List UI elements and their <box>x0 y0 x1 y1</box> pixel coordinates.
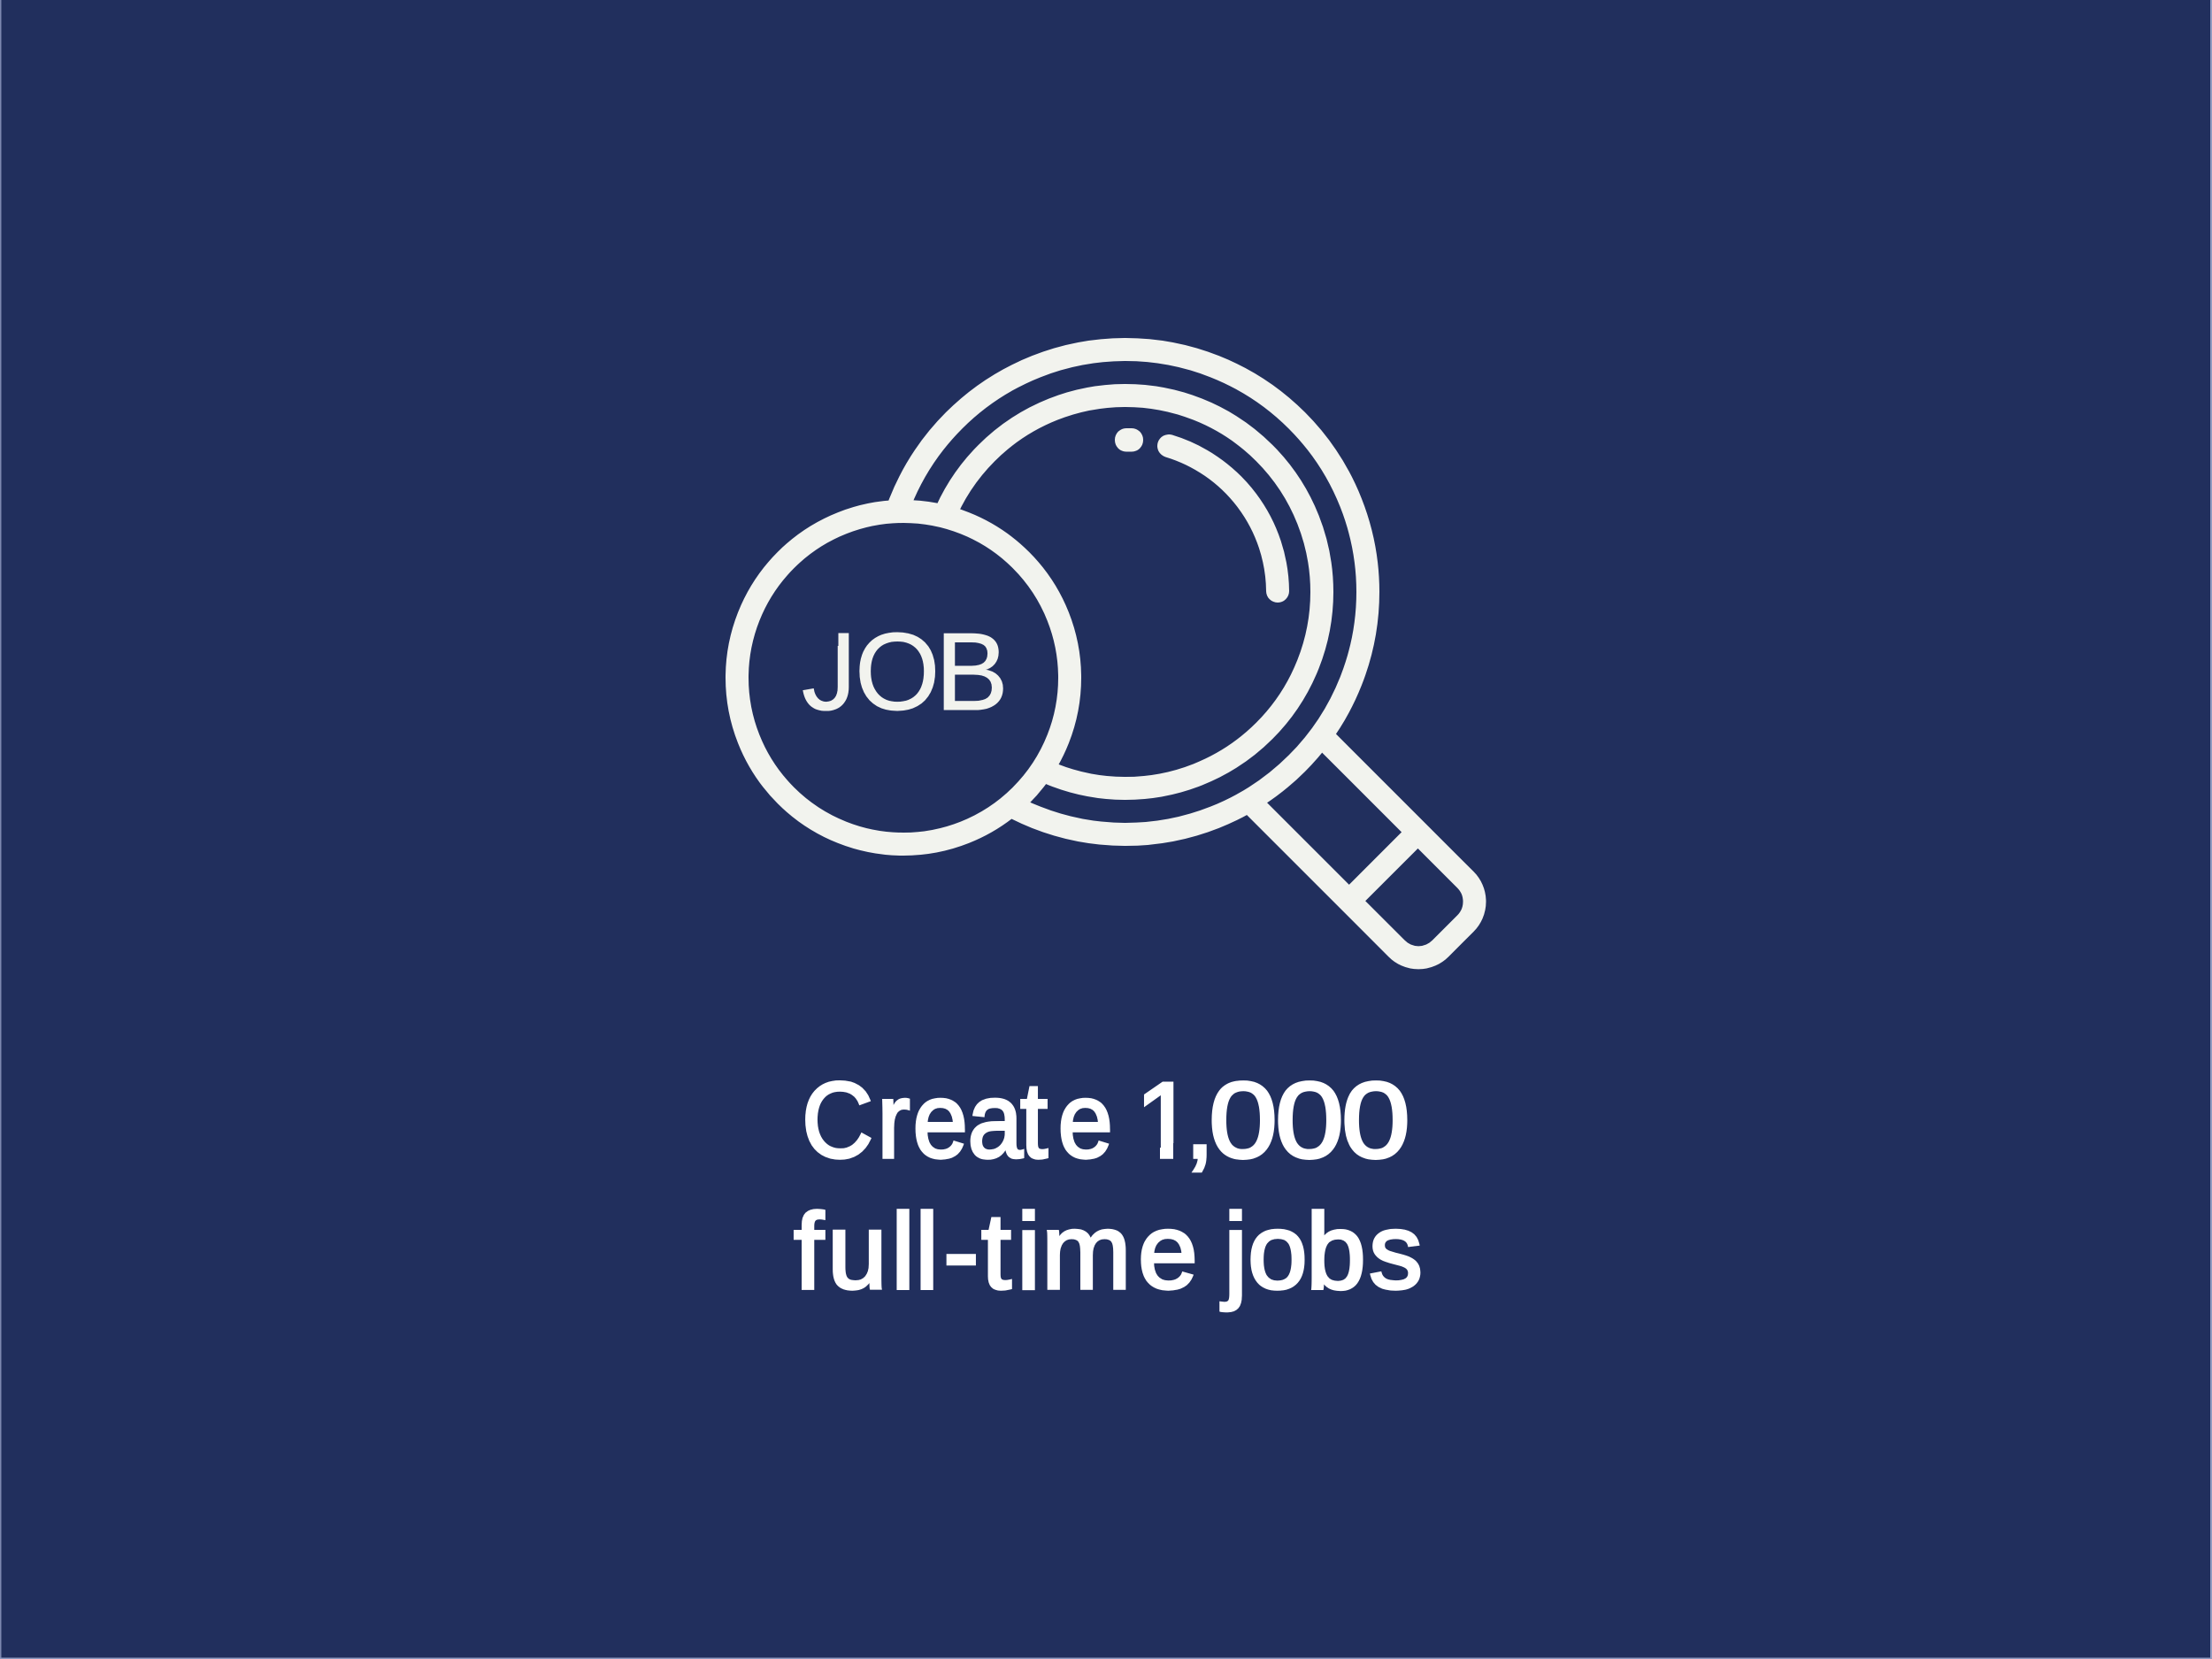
job circle <box>737 511 1070 844</box>
headline line 2: full-time jobs <box>794 1191 1423 1311</box>
magnifier handle <box>1248 735 1475 957</box>
magnifier outer ring <box>883 349 1368 834</box>
headline line 1 <box>802 1060 1410 1180</box>
lens highlight arc <box>1169 446 1278 591</box>
magnifier inner ring <box>929 396 1322 788</box>
job label: JOB <box>802 611 1009 733</box>
lens highlight dot <box>1115 428 1143 451</box>
comma: , <box>1185 1060 1215 1180</box>
headline <box>794 1060 1423 1311</box>
number: 1: 1 <box>1135 1060 1195 1180</box>
word: Create: Create <box>802 1060 1113 1180</box>
icon: magnifying glass over job circle <box>737 349 1475 957</box>
number: 000: 000 <box>1209 1060 1410 1180</box>
